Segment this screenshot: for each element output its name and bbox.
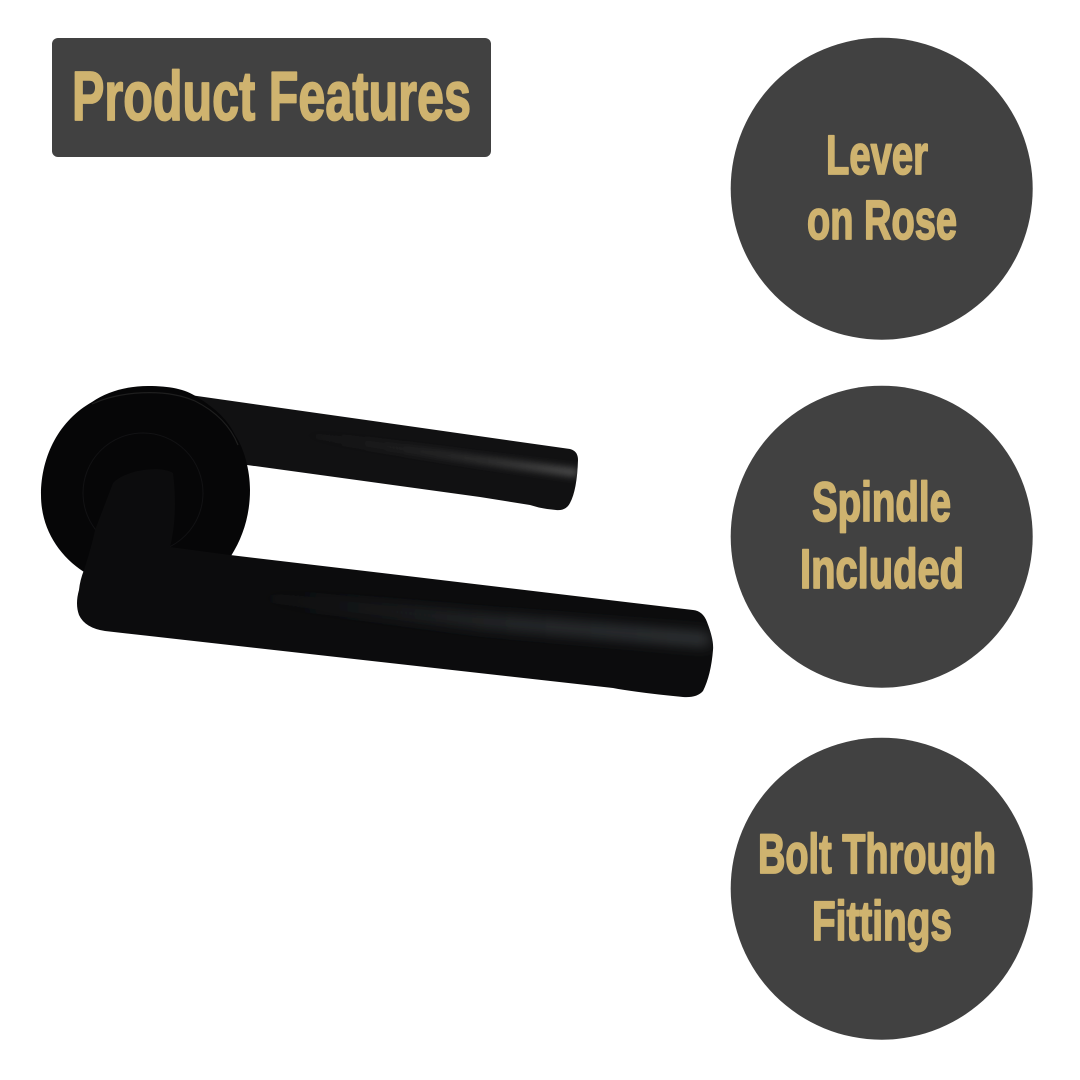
feature label: Fittings bbox=[812, 889, 952, 952]
title banner bbox=[52, 38, 491, 157]
rear lever bbox=[190, 395, 578, 510]
title text: Product Features bbox=[72, 57, 471, 135]
feature circle: lever on rose bbox=[731, 38, 1033, 340]
feature label: Included bbox=[800, 537, 964, 600]
feature label: Lever bbox=[826, 123, 928, 186]
feature label: Spindle bbox=[812, 470, 951, 533]
feature label bbox=[807, 123, 957, 251]
feature label: on Rose bbox=[807, 188, 957, 251]
feature label bbox=[800, 470, 964, 600]
feature label bbox=[758, 822, 996, 952]
rose plate bbox=[41, 386, 250, 590]
feature circle: spindle included bbox=[731, 386, 1033, 688]
feature circle: bolt through fittings bbox=[731, 738, 1033, 1040]
rose inner boss bbox=[83, 433, 203, 553]
front lever bbox=[77, 555, 714, 698]
product photo: black door lever handle bbox=[41, 386, 713, 697]
rose rim highlight bbox=[92, 393, 238, 445]
